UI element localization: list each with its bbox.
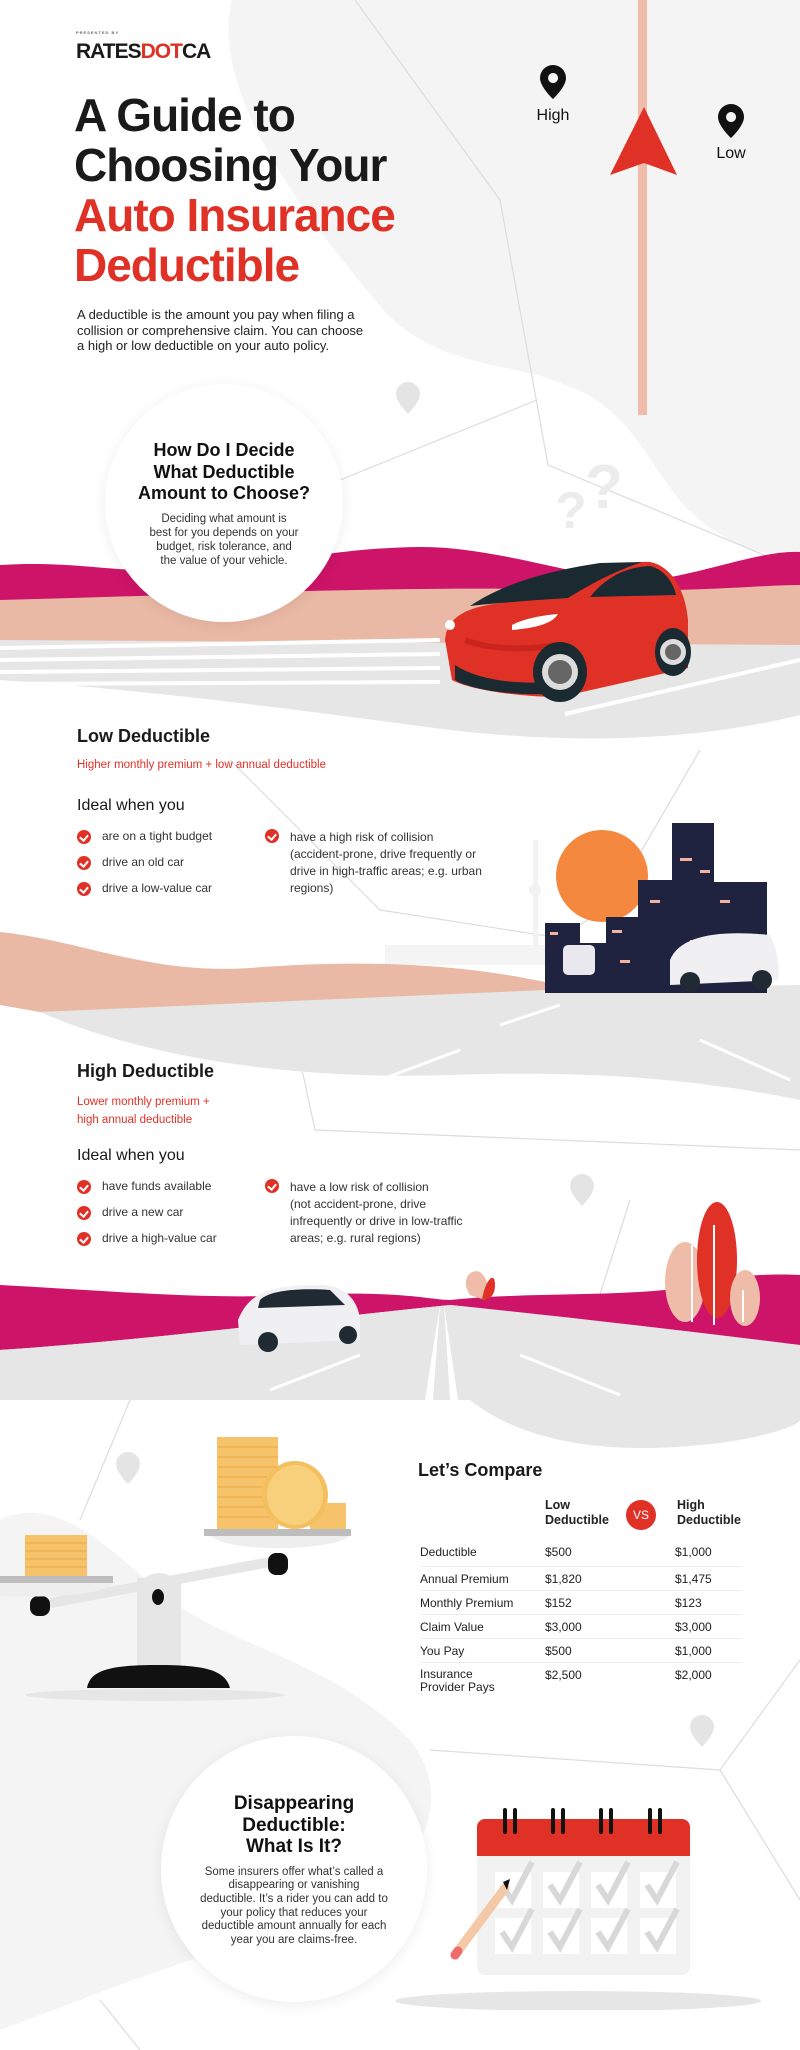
body	[200, 1866, 388, 1946]
table rows: $123	[675, 1596, 702, 1610]
table rows: $500	[545, 1644, 572, 1658]
heading: Amount to Choose?	[138, 483, 310, 503]
title	[74, 89, 395, 291]
heading: Let’s Compare	[418, 1460, 542, 1480]
title: Deductible	[74, 239, 299, 291]
checklist: have a high risk of collision	[290, 830, 433, 844]
heading	[234, 1793, 354, 1857]
body: deductible. It’s a rider you can add to	[200, 1893, 388, 1905]
intro text	[77, 307, 363, 353]
checklist	[77, 1179, 463, 1246]
heading: How Do I Decide	[153, 440, 295, 460]
title: A Guide to	[74, 89, 295, 141]
red subtitle	[77, 1096, 210, 1126]
low deductible section	[77, 726, 482, 896]
checklist: drive in high-traffic areas; e.g. urban	[290, 864, 482, 878]
heading: Disappearing	[234, 1793, 354, 1814]
table rows: You Pay	[420, 1644, 464, 1658]
table rows: Provider Pays	[420, 1680, 495, 1694]
table rows: $3,000	[545, 1620, 582, 1634]
table rows	[420, 1545, 742, 1694]
checklist: (accident-prone, drive frequently or	[290, 847, 476, 861]
body: Deciding what amount is	[161, 512, 287, 524]
table rows: Annual Premium	[420, 1572, 509, 1586]
column headers	[545, 1498, 741, 1530]
scale with coins	[0, 1437, 351, 1701]
ideal heading: Ideal when you	[77, 1147, 185, 1164]
table rows: Monthly Premium	[420, 1596, 513, 1610]
column headers: Low	[545, 1498, 570, 1512]
scenic band with red car	[0, 382, 800, 738]
intro text: a high or low deductible on your auto policy.	[77, 338, 329, 353]
high/low road graphic	[537, 0, 746, 415]
ideal heading: Ideal when you	[77, 797, 185, 814]
red subtitle: Lower monthly premium +	[77, 1096, 210, 1108]
red subtitle: Higher monthly premium + low annual deductible	[77, 759, 326, 771]
checklist: drive an old car	[102, 855, 184, 869]
checklist: drive a low-value car	[102, 881, 212, 895]
logo	[76, 30, 211, 63]
city scene	[0, 823, 800, 1100]
checklist: drive a high-value car	[102, 1231, 217, 1245]
scenic band with red car: ?	[585, 453, 623, 522]
rural scene	[0, 1174, 800, 1400]
checklist: infrequently or drive in low-traffic	[290, 1214, 463, 1228]
body: deductible amount annually for each	[202, 1920, 386, 1932]
table rows: $500	[545, 1545, 572, 1559]
body: disappearing or vanishing	[228, 1879, 360, 1891]
checklist	[77, 829, 482, 896]
body: budget, risk tolerance, and	[156, 540, 292, 552]
column headers: Deductible	[545, 1513, 609, 1527]
checklist: have a low risk of collision	[290, 1180, 429, 1194]
heading: What Deductible	[153, 462, 294, 482]
column headers: VS	[633, 1508, 649, 1522]
title: Auto Insurance	[74, 189, 395, 241]
checklist: areas; e.g. rural regions)	[290, 1231, 421, 1245]
table rows: $152	[545, 1596, 572, 1610]
circle: disappearing deductible	[161, 1736, 427, 2002]
body: the value of your vehicle.	[160, 554, 288, 566]
high deductible section	[77, 1061, 463, 1246]
checklist: are on a tight budget	[102, 829, 212, 843]
scenic band with red car: ?	[555, 482, 587, 540]
checklist: have funds available	[102, 1179, 211, 1193]
red subtitle: high annual deductible	[77, 1114, 192, 1126]
table rows: Deductible	[420, 1545, 477, 1559]
table rows: $1,000	[675, 1545, 712, 1559]
body	[150, 512, 298, 566]
table rows: $2,500	[545, 1668, 582, 1682]
logo: PRESENTED BY	[76, 30, 119, 35]
table rows: $3,000	[675, 1620, 712, 1634]
arrow	[610, 107, 677, 175]
heading: Low Deductible	[77, 726, 210, 746]
body: Some insurers offer what’s called a	[205, 1866, 383, 1878]
intro text: A deductible is the amount you pay when filing a	[77, 307, 355, 322]
checklist: (not accident-prone, drive	[290, 1197, 426, 1211]
intro text: collision or comprehensive claim. You can choose	[77, 322, 363, 338]
circle: how do I decide	[105, 384, 343, 622]
body: year you are claims-free.	[231, 1934, 357, 1946]
high/low road graphic: High	[537, 107, 569, 124]
title: Choosing Your	[74, 139, 386, 191]
table rows: Claim Value	[420, 1620, 484, 1634]
high/low road graphic: Low	[716, 145, 746, 162]
table rows: $1,820	[545, 1572, 582, 1586]
table rows: $1,475	[675, 1572, 712, 1586]
car	[445, 562, 691, 702]
table rows: $1,000	[675, 1644, 712, 1658]
column headers: Deductible	[677, 1513, 741, 1527]
checklist: regions)	[290, 881, 333, 895]
compare table	[418, 1460, 742, 1694]
heading: Deductible:	[242, 1814, 346, 1836]
table rows: Insurance	[420, 1667, 473, 1681]
body: your policy that reduces your	[220, 1907, 368, 1919]
checklist: drive a new car	[102, 1205, 183, 1219]
logo: RATESDOTCA	[76, 40, 210, 63]
heading: What Is It?	[246, 1836, 342, 1857]
calendar illustration	[395, 1715, 761, 2010]
column headers: High	[677, 1498, 705, 1512]
heading: High Deductible	[77, 1061, 214, 1081]
body: best for you depends on your	[150, 526, 298, 538]
table rows: $2,000	[675, 1668, 712, 1682]
heading	[138, 440, 310, 503]
